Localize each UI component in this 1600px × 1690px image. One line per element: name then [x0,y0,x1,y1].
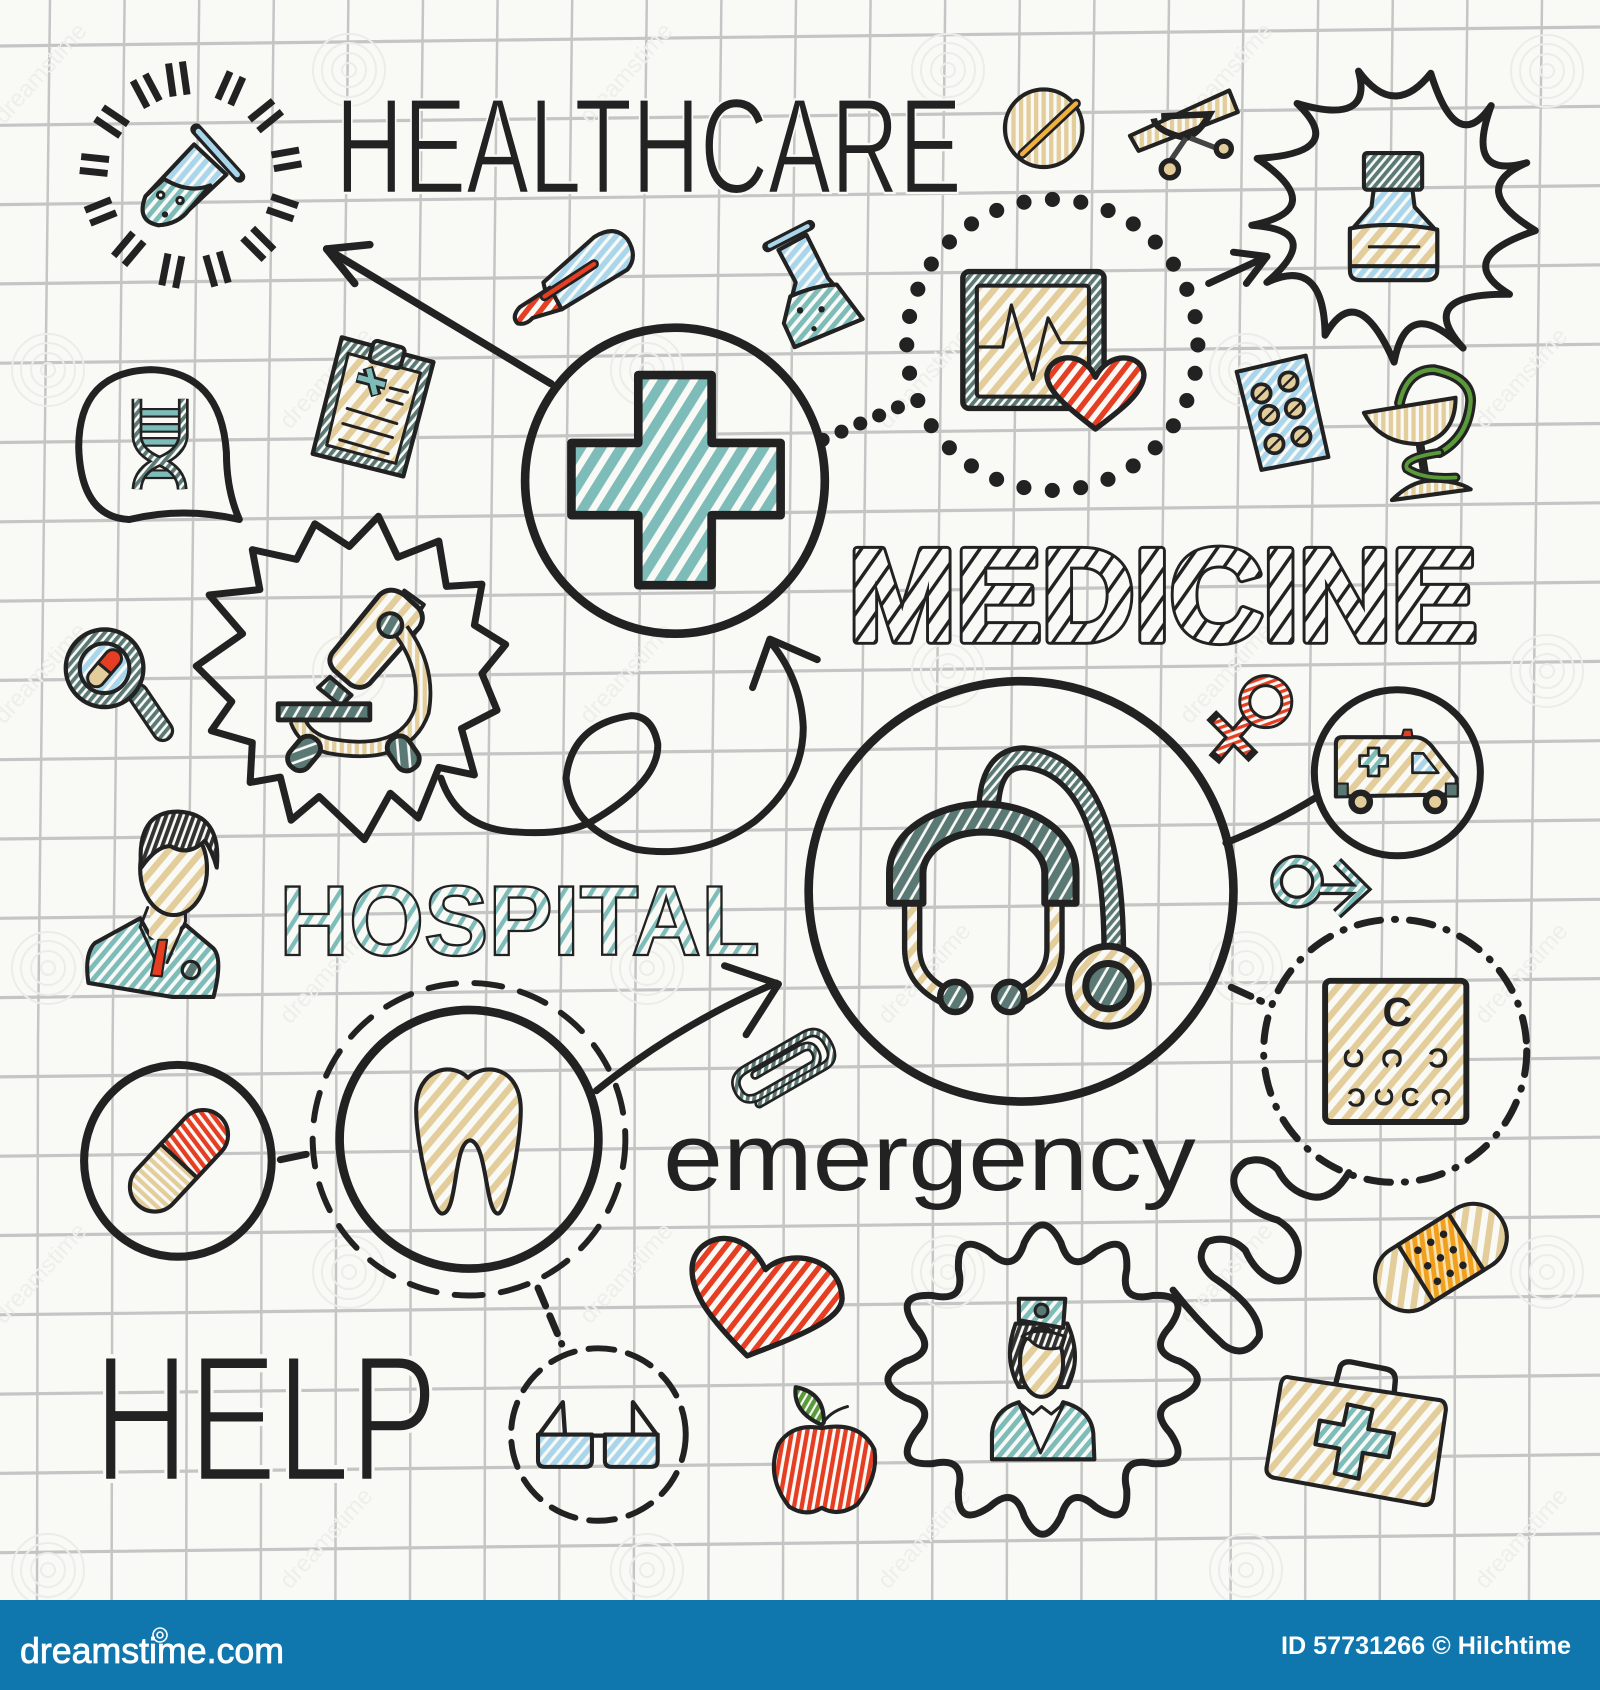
icon: forceps and bandage [1130,91,1238,178]
long tube [989,758,1114,948]
headset arch [890,804,1076,903]
watermark text: dreamstime [274,1483,378,1594]
cap [1019,1299,1065,1328]
footer band [0,1600,1600,1690]
big circle [809,681,1233,1102]
dotted ring [907,199,1198,490]
icon: ambulance [1336,730,1458,811]
icon: red heart [692,1238,842,1356]
circle [525,328,825,634]
icon: blister pack [1237,356,1328,470]
icon: eye chart: C [1371,1088,1399,1107]
icon: test tube with tick ring [80,61,302,288]
bubbles [157,192,183,216]
heading: emergency: emergency [663,1104,1196,1211]
icon: thermometer [515,231,633,324]
DNA strand [137,399,183,489]
watermark text: dreamstime [274,323,378,434]
handle [1336,1362,1395,1394]
neck [149,900,183,954]
icon: DNA speech bubble [79,370,239,519]
heading: MEDICINE: MEDICINE [849,522,1477,668]
circle [84,1065,272,1257]
icon: round tablet [1005,89,1083,167]
inner circle [340,1010,598,1269]
icon: first aid kit [1266,1362,1446,1505]
starburst outline [1252,71,1535,362]
icon: paper clip [731,1027,837,1110]
panel: gear with nurse [888,1225,1197,1534]
icon: band-aid [1362,1191,1519,1324]
watermark text: dreamstime [872,918,976,1029]
icon: eye chart: C [1426,1088,1454,1107]
watermark text: dreamstime [574,618,678,729]
watermark text: dreamstime [872,323,976,434]
icon: glasses [538,1402,658,1467]
icon: male symbol [1277,861,1364,914]
dash-dot circle [1264,919,1527,1182]
starburst outline [196,516,506,840]
icon: doctor [87,812,218,997]
tie [151,940,167,976]
icon: flask [768,225,863,347]
icon: microscope [278,590,424,775]
badge [182,961,199,979]
case [1266,1377,1446,1505]
tube body [143,144,226,225]
panel: starburst with microscope [196,516,506,840]
icon: heart on monitor [1047,358,1144,429]
head [140,822,207,915]
watermark text: dreamstime [1174,1218,1278,1329]
arrow: small arrow to starburst [1209,252,1267,283]
connector: wavy tube between eye circle and gear [1173,1160,1349,1351]
connector [1226,796,1318,843]
icon: bottle [1350,153,1437,280]
dashed outer circle [313,983,625,1296]
panel: dotted circle with monitor [907,199,1198,490]
ear tubes [912,903,947,997]
face [1020,1328,1063,1397]
heading: HEALTHCARE: HEALTHCARE [335,70,962,222]
watermark text: dreamstime [1174,18,1278,129]
bubble [79,370,239,519]
icon: tooth [416,1069,521,1214]
footer credit: ID 57731266 © Hilchtime [1281,1632,1571,1660]
icon: eye chart: C [1401,1084,1420,1112]
tick ring [80,61,302,288]
icon: bowl of Hygieia [1364,370,1471,500]
heading: HOSPITAL: HOSPITAL [279,866,760,977]
watermark text: dreamstime [1469,323,1573,434]
heading: MEDICINE: MEDICINE [849,522,1477,668]
icon: clipboard [313,337,433,476]
hair [141,812,217,868]
icon: eye chart: C [1383,989,1412,1035]
icon: eye chart: C [1428,1043,1448,1074]
icon: magnifying glass with capsule [66,629,163,731]
icon: monitor [963,272,1104,408]
body [992,1402,1094,1459]
icon: female symbol [1216,681,1287,754]
icon: nurse [992,1299,1094,1459]
heading: HELP: HELP [94,1318,438,1520]
suit [87,918,218,997]
panel: stethoscope circle [809,681,1233,1102]
connector: dotted line from cross circle [823,406,900,440]
panel: tooth circle [313,983,625,1296]
panel: glasses dashed circle [511,1348,686,1521]
icon: capsule [120,1100,238,1222]
tube cap [196,129,239,177]
connector: dashed line to glasses [538,1288,562,1344]
icon: medical cross [571,375,781,585]
watermark text: dreamstime [872,1483,976,1594]
icon: eye chart: C [1376,1048,1407,1069]
footer logo: dreamstime.com [20,1630,284,1671]
icon: eye chart: C [1347,1083,1366,1111]
cross [1315,1404,1394,1479]
icon: apple [774,1387,875,1512]
watermark text: dreamstime [1469,1483,1573,1594]
watermark text: dreamstime [274,918,378,1029]
hair [1010,1324,1075,1387]
watermark text: dreamstime [1469,918,1573,1029]
footer logo spiral [153,1628,167,1642]
watermark text: dreamstime [574,18,678,129]
icon: stethoscope [890,758,1148,1026]
arrow: curly arrow to cross circle [441,639,817,852]
chest piece [1068,946,1148,1026]
watermark text: dreamstime [1174,618,1278,729]
connector [1231,987,1261,1001]
panel: cross in circle [525,328,825,634]
arrow: tooth circle to stethoscope [596,966,778,1091]
icon: eye chart: C [1338,1048,1369,1069]
panel: capsule circle [84,1065,306,1257]
dashed circle [511,1348,686,1521]
watermark text: dreamstime [574,1218,678,1329]
panel: ambulance circle [1226,690,1480,856]
wavy gear outline [888,1225,1197,1534]
panel: eye chart dash-dot circle [1231,919,1527,1182]
icon: eye chart [1325,981,1466,1122]
connector [280,1154,306,1160]
arrow: cross circle to test tube [327,245,551,384]
ear tips [940,982,970,1012]
circle [1314,690,1480,856]
panel: starburst with bottle [1252,71,1535,362]
